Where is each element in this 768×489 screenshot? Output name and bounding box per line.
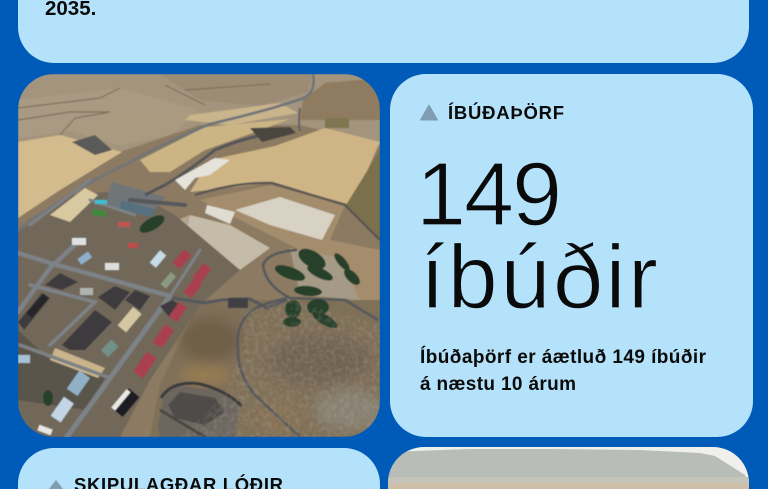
town roads [18, 180, 200, 437]
panel: housing need [390, 74, 753, 437]
body text: Íbúðaþörf er áætluð 149 íbúðir [420, 346, 707, 368]
big number [416, 145, 658, 328]
big number: íbúðir [420, 228, 658, 328]
heading: housing need: ÍBÚÐAÞÖRF [448, 102, 564, 123]
red buildings [118, 222, 211, 378]
panel: planned plots [18, 448, 380, 489]
highway [18, 74, 314, 232]
big number: 149 [416, 145, 562, 245]
mottled ground patches [179, 318, 385, 433]
photo: landscape with mountain [388, 447, 749, 489]
town ground [18, 190, 240, 437]
photo: aerial view of town [18, 74, 385, 437]
icon: triangle [49, 480, 63, 489]
icon: triangle [420, 105, 438, 120]
panel: top text card [18, 0, 749, 63]
dark lots [18, 273, 182, 350]
body text: á næstu 10 árum [420, 374, 576, 395]
body text [420, 346, 707, 395]
trees [43, 212, 363, 406]
other buildings [67, 371, 90, 396]
lower right scrub [150, 300, 380, 437]
speckle texture [180, 300, 380, 437]
